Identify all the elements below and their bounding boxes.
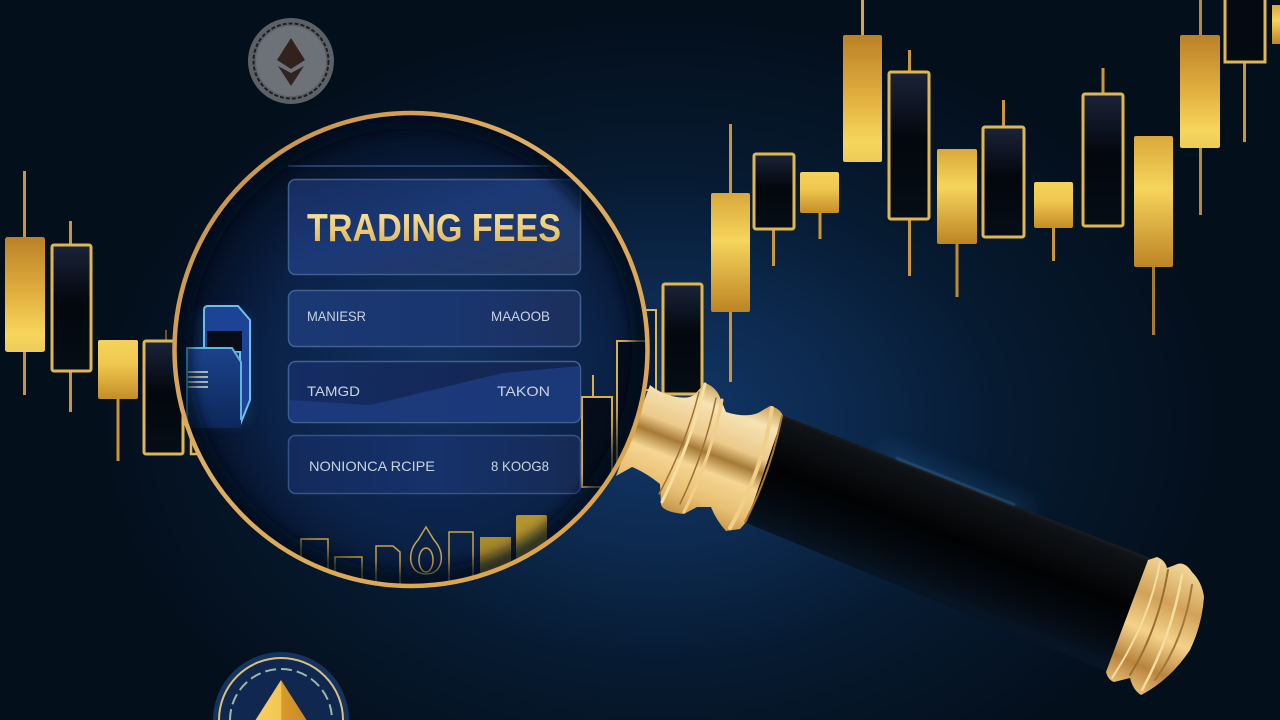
panel: title	[288, 180, 580, 274]
lens ring	[174, 113, 648, 586]
candle 3	[98, 340, 138, 461]
brass end cap	[1106, 557, 1204, 695]
panel: row 3	[288, 436, 580, 494]
icon: wallet cards	[187, 306, 250, 428]
row 3 value: 8 KOOG8	[491, 458, 549, 474]
icon: ethereum coin	[248, 18, 334, 104]
candle 8	[754, 154, 794, 266]
wallet glow	[195, 310, 250, 425]
candle 1	[5, 171, 45, 395]
handle top highlight	[896, 458, 1015, 505]
mini gold candles	[480, 537, 511, 573]
candle 17	[1180, 0, 1220, 215]
row 2 label: TAMGD	[307, 383, 360, 399]
heading: trading fees: TRADING FEES	[307, 207, 561, 250]
collar ridges	[659, 384, 782, 528]
lens	[174, 113, 657, 592]
candle 14	[1034, 182, 1073, 261]
row 2 light facet	[289, 366, 580, 423]
lens contents	[179, 118, 657, 592]
front card edge	[187, 348, 241, 420]
candle 5	[191, 330, 221, 454]
candle 11	[889, 50, 929, 276]
candle 18	[1225, 0, 1265, 142]
candle 16	[1134, 136, 1173, 335]
candle behind lens	[640, 310, 656, 390]
magnifying glass	[174, 113, 1204, 695]
row 3 label: NONIONCA RCIPE	[309, 458, 435, 474]
magnified candles	[581, 340, 645, 488]
left candlestick chart	[5, 171, 221, 461]
candle 13	[983, 100, 1024, 237]
candle 7	[711, 124, 750, 382]
top divider	[288, 165, 550, 167]
candle 12	[937, 149, 977, 297]
mini candle outlines	[300, 531, 474, 584]
lens edge shade	[179, 118, 643, 582]
candle 15	[1083, 68, 1123, 226]
candle 2	[52, 221, 91, 412]
row 1 value: MAAOOB	[491, 308, 550, 324]
candle 9	[800, 172, 839, 239]
back card	[204, 306, 250, 425]
candle 4	[144, 330, 183, 454]
candle 19	[1272, 5, 1280, 44]
row 2 value: TAKON	[497, 383, 550, 399]
right candlestick chart	[640, 0, 1280, 394]
lens glass	[176, 114, 646, 584]
mini skyline chart	[300, 515, 547, 584]
candle 10	[843, 0, 882, 162]
icon: bottom coin	[213, 652, 349, 720]
mini crown icon	[411, 527, 441, 574]
brass collar	[616, 383, 783, 531]
end cap ridges	[1112, 562, 1192, 690]
handle shaft	[744, 415, 1150, 672]
handle	[616, 383, 1204, 695]
card stripes	[188, 372, 208, 387]
front card	[187, 348, 241, 428]
row 1 label: MANIESR	[307, 308, 366, 324]
panel: row 2	[288, 362, 580, 423]
handle glow	[880, 450, 1030, 510]
panel: row 1	[288, 290, 580, 346]
candle 6	[663, 284, 702, 394]
